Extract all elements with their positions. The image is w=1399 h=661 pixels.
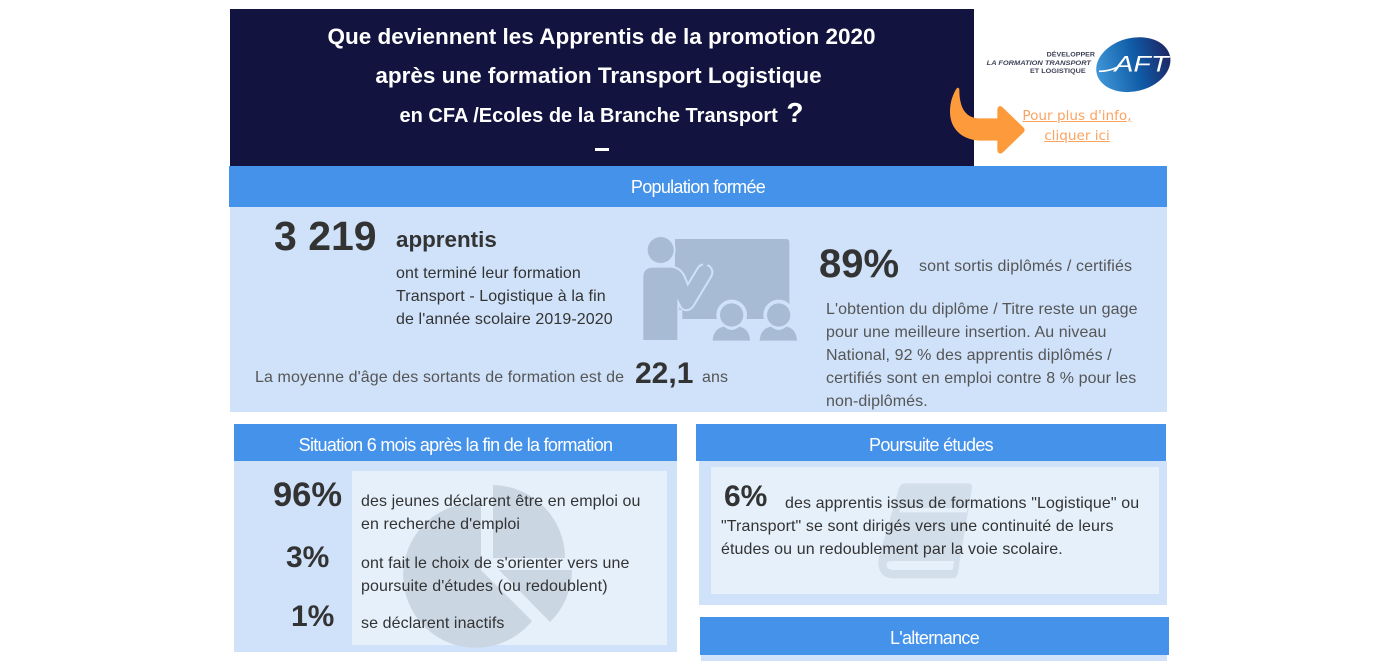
logo: AFT: AFT xyxy=(1112,52,1170,77)
text: poursuite d'études: ont fait le choix de s'orienter vers une xyxy=(361,555,630,572)
heading: poursuite études xyxy=(696,424,1166,461)
label: ans: ans xyxy=(702,369,728,386)
icon: orange arrow xyxy=(950,88,1025,154)
heading: alternance xyxy=(700,617,1169,655)
stat: 3 219: 3 219 xyxy=(274,213,377,259)
text: poursuite d'études: poursuite d'études (ou redoublent) xyxy=(361,578,608,595)
stat: 96%: 96% xyxy=(273,476,342,514)
text: inactifs: se déclarent inactifs xyxy=(361,615,505,632)
text: en emploi: des jeunes déclarent être en emploi ou xyxy=(361,493,641,510)
link: more info: cliquer ici xyxy=(1044,128,1110,144)
label: apprentis: apprentis xyxy=(396,227,497,252)
heading: situation 6 mois xyxy=(234,424,677,461)
text: obtention du diplôme: National, 92 % des apprentis diplômés / xyxy=(826,347,1112,364)
panel: situation 6 mois xyxy=(234,461,677,652)
text: en emploi xyxy=(361,493,641,533)
panel: poursuite études xyxy=(699,461,1167,605)
text: sortis diplômés: sont sortis diplômés / certifiés xyxy=(919,258,1132,275)
heading: population formée: Population formée xyxy=(631,177,765,197)
title line 3: en CFA /Ecoles de la Branche Transport ? xyxy=(400,97,803,128)
text: poursuite d'études xyxy=(361,555,630,595)
stat: 3%: 3% xyxy=(286,541,329,574)
icon: teacher and students xyxy=(643,237,797,341)
heading: alternance: L'alternance xyxy=(890,628,979,648)
stat: 22,1: 22,1 xyxy=(635,357,693,390)
heading: situation 6 mois: Situation 6 mois après la fin de la formation xyxy=(299,435,612,455)
stat: 1%: 1% xyxy=(291,600,334,633)
stat: 89%: 89% xyxy=(819,242,899,286)
text: obtention du diplôme: pour une meilleure insertion. Au niveau xyxy=(826,324,1107,341)
title banner xyxy=(230,9,974,166)
text: formation terminée xyxy=(396,265,613,328)
text: moyenne d'âge: La moyenne d'âge des sortants de formation est de xyxy=(255,369,624,386)
heading: poursuite études: Poursuite études xyxy=(869,435,993,455)
inner panel: poursuite xyxy=(711,467,1159,594)
logo: AFT xyxy=(986,37,1170,92)
text: obtention du diplôme: non-diplômés. xyxy=(826,393,928,410)
logo: AFT: DÉVELOPPER xyxy=(1047,50,1095,59)
text: obtention du diplôme: L'obtention du diplôme / Titre reste un gage xyxy=(826,301,1138,318)
text: formation terminée: de l'année scolaire 2019-2020 xyxy=(396,311,613,328)
text: en emploi: en recherche d'emploi xyxy=(361,516,520,533)
text: continuité d'études xyxy=(721,495,1139,558)
panel: alternance xyxy=(701,655,1167,661)
panel: population formée xyxy=(230,207,1167,412)
title dash xyxy=(595,148,609,151)
icon: book watermark xyxy=(878,484,972,578)
text: formation terminée: Transport - Logistique à la fin xyxy=(396,288,606,305)
inner panel: situation xyxy=(352,471,667,645)
text: obtention du diplôme: certifiés sont en emploi contre 8 % pour les xyxy=(826,370,1136,387)
text: continuité d'études: études ou un redoublement par la voie scolaire. xyxy=(721,541,1063,558)
logo: AFT: LA FORMATION TRANSPORT xyxy=(987,60,1092,67)
title line 2: après une formation Transport Logistique xyxy=(375,63,822,88)
text: continuité d'études: des apprentis issus de formations "Logistique" ou xyxy=(785,495,1139,512)
text: continuité d'études: "Transport" se sont dirigés vers une continuité de leurs xyxy=(721,518,1114,535)
stat: 6%: 6% xyxy=(724,480,767,513)
logo: AFT: ET LOGISTIQUE xyxy=(1030,68,1086,75)
text: formation terminée: ont terminé leur formation xyxy=(396,265,581,282)
chart: pie watermark xyxy=(403,485,572,648)
heading: population formée xyxy=(229,166,1167,207)
title line 1: Que deviennent les Apprentis de la promotion 2020 xyxy=(327,24,876,49)
text: obtention du diplôme xyxy=(826,301,1138,410)
link: more info xyxy=(1022,108,1132,144)
link: more info: Pour plus d'info, xyxy=(1022,108,1132,124)
